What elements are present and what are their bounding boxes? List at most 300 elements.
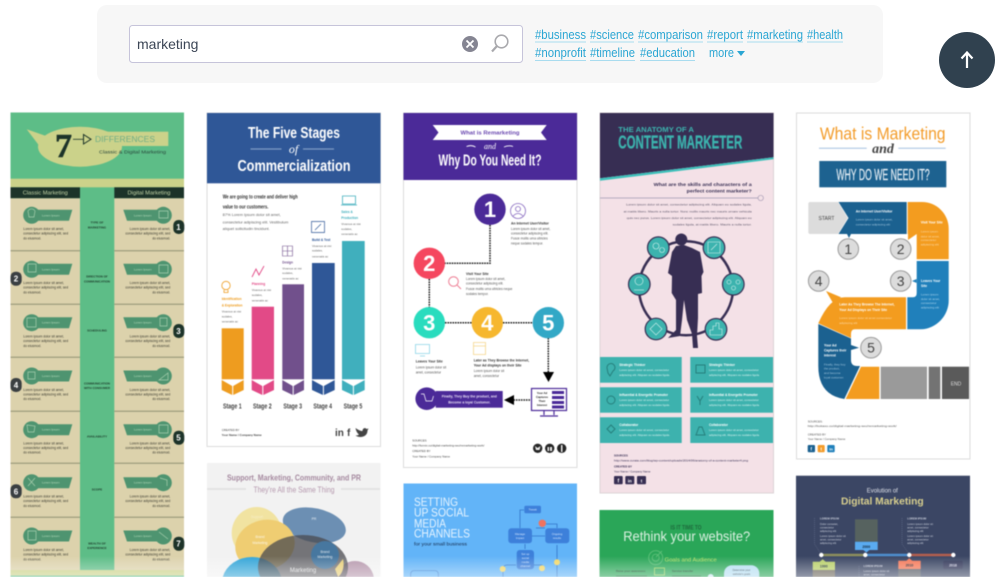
- step 4 text: amet, consectetur: [474, 374, 500, 378]
- photo 2010: [898, 569, 921, 577]
- credits: CREATED BY: [222, 428, 239, 432]
- step tile 4: Lorem ipsum dolor sit amet consectetur: [839, 316, 892, 320]
- right column paragraphs: consectetur adipiscing elit, sed: [125, 339, 170, 343]
- left column paragraphs: Lorem ipsum dolor sit amet,: [23, 281, 64, 285]
- bar: stage 5: [342, 241, 365, 410]
- header: Why Do You Need It?: [438, 153, 542, 170]
- column headers: [10, 187, 184, 198]
- title: MEDIA: [414, 518, 446, 530]
- audience bubble: Determine your: [733, 568, 750, 572]
- right column paragraphs: do eiusmod.: [152, 504, 170, 508]
- divider with knob: [600, 195, 763, 201]
- start tile: [808, 202, 848, 234]
- step 3 text: amet, consectetur: [416, 370, 442, 374]
- numbered tabs: 4: [14, 381, 19, 390]
- orange end tile: [846, 367, 879, 399]
- sources: http://bokaxo.co/digital-marketing-seo/remarketing-work/: [808, 424, 897, 428]
- right column paragraphs: Lorem ipsum dolor sit amet,: [130, 548, 170, 552]
- flow chart: [500, 506, 569, 577]
- flow chart: Tweak: [529, 508, 537, 512]
- step tile 4: adipiscing elit: [839, 321, 857, 325]
- left column paragraphs: do eiusmod.: [23, 236, 41, 240]
- text block: top left: LOREM IPSUM: [820, 516, 840, 520]
- sources: Your Name / Company Name: [614, 470, 651, 474]
- photo 1990: [813, 570, 835, 577]
- card: 7 differences classic and digital marketing: [10, 112, 184, 577]
- left column paragraphs: Lorem ipsum dolor sit amet,: [23, 227, 64, 231]
- header: CONTENT MARKETER: [618, 131, 742, 152]
- left column paragraphs: [23, 227, 68, 561]
- left column paragraphs: Lorem ipsum dolor sit amet,: [23, 548, 64, 552]
- monitor ad graphic: Your Ad: [537, 391, 548, 395]
- step circles: 3: [423, 310, 435, 336]
- monitor ad graphic: Their: [539, 399, 546, 403]
- marker numbers: 1: [844, 241, 852, 257]
- photo 2000: [855, 519, 878, 542]
- small node: [708, 574, 714, 577]
- right column paragraphs: Lorem ipsum dolor sit amet,: [130, 227, 170, 231]
- centre column labels: COMMUNICATION: [84, 381, 110, 385]
- stage captions and icons: Vivamus at nisi: [341, 222, 361, 226]
- search input: marketing: [137, 36, 198, 52]
- step tile 3: adipiscing elit: [921, 306, 939, 310]
- venn labels: Support: [251, 515, 263, 519]
- skill card 5: [600, 417, 682, 443]
- text block: top left: consectetur: [820, 526, 834, 530]
- skill card 5: Collaborator: [619, 423, 639, 427]
- title: Rethink your website?: [623, 528, 750, 544]
- stage captions and icons: Vivamus at nisi: [312, 244, 332, 248]
- right column paragraphs: [125, 227, 170, 561]
- right column paragraphs: consectetur adipiscing elit, sed: [125, 446, 170, 450]
- stage captions and icons: venenatis ac: [222, 319, 238, 323]
- step circles: 4: [481, 310, 494, 336]
- tag 1990: [813, 559, 835, 570]
- centre column labels: WEALTH OF: [88, 541, 106, 545]
- step 2 text: Lorem ipsum dolor sit amet,: [466, 277, 505, 281]
- skill card 6: Lorem ipsum dolor sit amet, consectetur: [709, 428, 759, 432]
- tag 1990: 1990: [820, 564, 828, 568]
- right column paragraphs: consectetur adipiscing elit, sed: [125, 553, 170, 557]
- step tile 3: consectetur: [921, 301, 937, 305]
- hashtag links: more: [709, 46, 734, 60]
- stage captions and icons: venenatis ac: [312, 254, 329, 258]
- ribbon labels: Lorem Ipsum: [134, 213, 152, 217]
- skill cards: [600, 357, 773, 443]
- right column paragraphs: do eiusmod.: [152, 344, 170, 348]
- step tile 5: loyal customer.: [824, 376, 844, 380]
- step 4 text: Lorem ipsum dolor sit: [474, 369, 504, 373]
- question heading: [654, 182, 752, 194]
- header: [600, 113, 774, 181]
- venn labels: Marketing: [253, 541, 268, 545]
- grey tiles: END: [951, 382, 962, 388]
- ribbon labels: Lorem Ipsum: [42, 213, 60, 217]
- icon: line chart: [252, 266, 264, 277]
- hashtag links: #health: [807, 28, 843, 42]
- step circles: [414, 194, 564, 338]
- stage captions and icons: sodales,: [282, 271, 293, 275]
- ribbon labels: Lorem Ipsum: [42, 321, 60, 325]
- right column paragraphs: do eiusmod.: [152, 397, 170, 401]
- skill card 1: Lorem ipsum dolor sit amet, consectetur: [619, 368, 669, 372]
- stage captions and icons: Sales &: [341, 210, 354, 214]
- step tile 4: Your Ad Displays on Their Site: [839, 308, 887, 312]
- left column snippets: Raise your awareness: [616, 569, 646, 573]
- skill card 5: adipiscing elit. Aliquam eu sodales ligula.: [619, 433, 670, 437]
- left column snippets: Service transfer: [672, 569, 694, 573]
- ribbon labels: Lorem Ipsum: [42, 374, 60, 378]
- social icons: [533, 444, 566, 453]
- left column paragraphs: do eiusmod.: [23, 557, 41, 561]
- left column paragraphs: consectetur adipiscing elit, sed: [23, 339, 68, 343]
- text block: top right: Lorem ipsum dolor sit: [907, 522, 933, 526]
- venn labels: Marketing: [290, 568, 316, 574]
- social icon facebook: f: [347, 428, 351, 439]
- skill card 2: Lorem ipsum dolor sit amet, consectetur: [709, 368, 759, 372]
- title: SETTING: [414, 497, 458, 509]
- left column paragraphs: consectetur adipiscing elit, sed: [23, 232, 68, 236]
- intro text: [223, 195, 298, 231]
- bar: stage 2: Stage 2: [253, 403, 272, 410]
- subtitle banner: [819, 161, 946, 187]
- arrow: down to monitor: [543, 372, 554, 382]
- card: anatomy of a content marketer: [600, 113, 774, 493]
- bar: stage 4: Stage 4: [313, 403, 332, 410]
- text block: top left: adipiscing elit: [820, 529, 836, 533]
- final customer banner: Become a loyal Customer.: [448, 400, 490, 404]
- ribbon labels: Lorem Ipsum: [42, 481, 60, 485]
- social squares: f: [617, 478, 619, 484]
- audience bubble: website's goals: [733, 572, 751, 576]
- intro paragraph: quis nec purus. Lorem ipsum dolor sit amet, consectetur adipiscing elit. Aliquam eu: [627, 216, 752, 220]
- header graphic: Classic & Digital Marketing: [99, 149, 167, 154]
- search and tag bar: [97, 5, 883, 83]
- centre column labels: WITH CONSUMER: [84, 386, 111, 390]
- left column paragraphs: Lorem ipsum dolor sit amet,: [23, 334, 64, 338]
- text block: bottom middle: amet, consectetur: [864, 572, 885, 576]
- left column paragraphs: do eiusmod.: [23, 397, 41, 401]
- header: Commercialization: [238, 158, 350, 175]
- section heading: Goals and Audience: [665, 558, 717, 564]
- social squares: in: [628, 478, 632, 483]
- card: setting up social media channels: [404, 484, 577, 577]
- and divider: and: [872, 142, 895, 157]
- skill card 3: Influential & Energetic Promoter: [619, 393, 669, 397]
- grey tiles: [881, 367, 969, 399]
- card: five stages of commercialization: [207, 113, 380, 446]
- intro paragraph: Lorem ipsum dolor sit amet, consectetur adipiscing elit. Aliquam eu sodales ligula,: [626, 203, 752, 207]
- step tile 1: consectetur adipiscing elit: [856, 222, 890, 226]
- step tile 4: [818, 291, 906, 338]
- numbered tabs: 3: [176, 327, 181, 336]
- intro text: consectetur adipiscing elit. Vestibulum: [223, 220, 289, 224]
- step 2 text: [449, 272, 513, 296]
- centre column labels: DIRECTION OF: [86, 275, 108, 279]
- marker numbers: 3: [897, 273, 905, 289]
- sources: Your Name / Company Name: [412, 454, 450, 458]
- step tile 4: Later As They Browse The Internet,: [839, 303, 895, 307]
- step tile 3: dolor sit amet,: [921, 297, 940, 301]
- header graphic: DIFFERENCES: [95, 135, 155, 144]
- bar: stage 1: Stage 1: [223, 403, 242, 410]
- step tile 1: Lorem ipsum dolor sit amet,: [856, 218, 893, 222]
- right column paragraphs: do eiusmod.: [152, 557, 170, 561]
- hashtag links: [535, 28, 843, 60]
- step tile 2: adipiscing elit: [921, 242, 939, 246]
- intro text: We are going to create and deliver high: [223, 195, 298, 201]
- title: What is Marketing: [820, 123, 946, 143]
- left column snippets: [616, 569, 701, 576]
- skill card 4: adipiscing elit. Aliquam eu sodales ligula.: [709, 403, 760, 407]
- venn title: They're All the Same Thing: [254, 486, 334, 495]
- text block: top right: amet, consectetur: [907, 538, 929, 542]
- credits: Your Name / Company Name: [222, 433, 262, 437]
- numbered markers: [808, 239, 911, 358]
- start tile: START: [819, 216, 834, 222]
- ribbon labels: Lorem Ipsum: [134, 534, 152, 538]
- text block: top left: amet, consectetur: [820, 538, 841, 542]
- ribbons: [23, 207, 172, 545]
- sources: CREATED BY: [412, 449, 431, 453]
- intro paragraph: sodales ligula, at mattis libero. Mauris a nulla tortor.: [673, 223, 752, 227]
- stage captions and icons: sodales,: [252, 293, 263, 297]
- venn title: Support, Marketing, Community, and PR: [227, 473, 361, 483]
- stage captions and icons: sodales,: [312, 249, 323, 253]
- header: What is Remarketing: [460, 130, 520, 136]
- numbered tabs: 2: [14, 275, 19, 284]
- right column paragraphs: consectetur adipiscing elit, sed: [125, 232, 170, 236]
- icon: small screen: [654, 568, 664, 575]
- title: Digital Marketing: [841, 495, 924, 507]
- step 1 text: neque sodales tempor.: [511, 242, 543, 246]
- header graphic: 7: [55, 128, 72, 165]
- step tile 5: Captures their: [824, 349, 847, 353]
- social squares: in: [829, 446, 833, 452]
- step 1 text: Lorem ipsum dolor sit amet,: [511, 227, 550, 231]
- marker numbers: 2: [897, 241, 905, 257]
- left column paragraphs: consectetur adipiscing elit, sed: [23, 553, 68, 557]
- step tile 1: An Internet User/Visitor: [856, 209, 893, 213]
- sources: SOURCES: [412, 438, 427, 442]
- step tile 3: Site: [921, 284, 927, 288]
- sources: [614, 454, 749, 474]
- icon: magnifier: [492, 35, 508, 52]
- step tile 5: interest: [824, 354, 837, 358]
- left column paragraphs: Lorem ipsum dolor sit amet,: [23, 441, 64, 445]
- step tile 5: the product,: [824, 366, 840, 370]
- flow chart: social: [522, 556, 529, 560]
- step 1 text: An Internet User/Visitor: [511, 222, 549, 226]
- social squares: t: [820, 446, 822, 452]
- step 1 text: consectetur adipiscing elit.: [511, 232, 548, 236]
- bottom fade overlay: [0, 556, 1000, 577]
- device outline: [411, 571, 438, 577]
- step tile 5: Finally, they buy: [824, 362, 846, 366]
- centre column labels: SCHEDULING: [87, 328, 108, 332]
- numbered tabs: 6: [14, 487, 19, 496]
- text block: top right: adipiscing elit: [907, 541, 924, 545]
- hashtag links: #comparison: [638, 28, 703, 42]
- numbered tabs: 1: [176, 223, 181, 232]
- skill card 4: [690, 387, 773, 413]
- icon: target: [649, 551, 663, 565]
- ribbon labels: Lorem Ipsum: [134, 321, 152, 325]
- text block: bottom middle: LOREM IPSUM: [864, 564, 883, 568]
- social squares: t: [641, 478, 643, 483]
- skill card 3: adipiscing elit. Aliquam eu sodales ligula.: [619, 403, 670, 407]
- text block: top right: LOREM IPSUM: [907, 516, 927, 520]
- step tile 5: [818, 324, 860, 399]
- icon: laptop heart: [341, 196, 357, 205]
- subtitle: for your small business: [414, 541, 468, 546]
- stage captions and icons: sodales,: [341, 227, 352, 231]
- skill card 6: Collaborator: [709, 423, 729, 427]
- stage captions and icons: sodales,: [222, 314, 233, 318]
- skill card 3: Lorem ipsum dolor sit amet, consectetur: [619, 398, 669, 402]
- step 4 text: Later as They Browse the Internet,: [474, 359, 529, 363]
- silhouette: [668, 234, 704, 348]
- intro text: value to our customers.: [223, 204, 269, 210]
- monitor ad graphic: [532, 388, 566, 416]
- right column paragraphs: do eiusmod.: [152, 451, 170, 455]
- centre column labels: [84, 220, 111, 550]
- left column paragraphs: do eiusmod.: [23, 504, 41, 508]
- right column paragraphs: consectetur adipiscing elit, sed: [125, 499, 170, 503]
- right column paragraphs: consectetur adipiscing elit, sed: [125, 286, 170, 290]
- centre column labels: AVAILABILITY: [87, 435, 107, 439]
- step 4 text: [474, 342, 529, 378]
- step 3 text: [416, 344, 446, 374]
- bar chart: stages: [222, 241, 365, 410]
- left column paragraphs: Lorem ipsum dolor sit amet,: [23, 388, 64, 392]
- scroll to top button: [939, 32, 995, 88]
- step tile 2: consectetur: [921, 238, 936, 242]
- header: [207, 113, 380, 183]
- ribbon labels: Lorem Ipsum: [42, 428, 60, 432]
- skill card 5: Lorem ipsum dolor sit amet, consectetur: [619, 428, 669, 432]
- stage captions and icons: & Exploration: [222, 304, 242, 308]
- step 2 text: Fusce mollis urna ultricies neque: [466, 287, 513, 291]
- ribbon labels: [42, 213, 152, 538]
- skill card 4: Lorem ipsum dolor sit amet, consectetur: [709, 398, 759, 402]
- skill card 4: Influential & Energetic Promoter: [709, 393, 758, 397]
- text block: top right: adipiscing elit: [907, 529, 924, 533]
- venn labels: Brand: [320, 550, 330, 554]
- stage captions and icons: Identification: [222, 297, 242, 301]
- and divider: [819, 142, 946, 157]
- text block: bottom middle: Lorem ipsum dolor sit: [864, 569, 889, 573]
- stage captions and icons: [222, 196, 361, 323]
- ribbon labels: Lorem Ipsum: [134, 428, 152, 432]
- board game path: [808, 202, 969, 399]
- stage captions and icons: venenatis ac: [252, 298, 268, 302]
- stage captions and icons: venenatis ac: [341, 232, 358, 236]
- step tile 3: Lorem ipsum: [921, 292, 939, 296]
- text block: top right: amet, consectetur: [907, 526, 929, 530]
- skill nodes: [628, 237, 744, 340]
- right column paragraphs: Lorem ipsum dolor sit amet,: [130, 281, 170, 285]
- left column paragraphs: consectetur adipiscing elit, sed: [23, 392, 68, 396]
- flow chart: Impact: [516, 536, 524, 540]
- flow chart: channel: [520, 564, 531, 568]
- flow chart: Ongoing: [552, 532, 563, 536]
- stage captions and icons: Build & Test: [312, 238, 331, 242]
- sources: http://funnix.co/digital-marketing-seo/remarketing-work/: [412, 444, 484, 448]
- intro paragraph: [624, 203, 752, 227]
- title: [414, 497, 470, 540]
- audience bubble: [724, 565, 759, 577]
- step 3 text: Lorem ipsum dolor sit: [416, 366, 446, 370]
- intro text: 87% Lorem Ipsum dolor sit amet,: [223, 213, 281, 217]
- ribbon labels: Lorem Ipsum: [134, 481, 152, 485]
- arrow: left to customer: [504, 395, 514, 405]
- text block: top left: Lorem ipsum dolor sit: [820, 534, 846, 538]
- numbered tabs: 5: [176, 434, 181, 443]
- header: and: [484, 142, 497, 151]
- left column paragraphs: Lorem ipsum dolor sit amet,: [23, 494, 64, 498]
- right column paragraphs: do eiusmod.: [152, 236, 170, 240]
- flow chart: media: [521, 560, 530, 564]
- left column paragraphs: consectetur adipiscing elit, sed: [23, 446, 68, 450]
- step circles: 1: [484, 197, 496, 222]
- hashtag links: #marketing: [747, 28, 803, 42]
- step tile 1: [838, 202, 907, 238]
- card: what is remarketing: [404, 113, 577, 468]
- tag 2010: 2010: [906, 564, 913, 568]
- left column paragraphs: do eiusmod.: [23, 344, 41, 348]
- final customer banner: Finally, They Buy the product, and: [442, 395, 497, 399]
- title: UP SOCIAL: [414, 508, 470, 520]
- bar: stage 3: [282, 284, 304, 410]
- intro text: aliquet sollicitudin tincidunt.: [223, 227, 270, 231]
- bar: stage 2: [252, 307, 274, 410]
- monitor ad graphic: Captures: [536, 395, 549, 399]
- tag 2018: [943, 561, 963, 569]
- monitor ad graphic: Interest: [537, 403, 547, 407]
- final customer banner: [415, 387, 503, 410]
- venn labels: PR: [312, 517, 317, 521]
- skills ring: [628, 234, 744, 348]
- tag 2010: [898, 558, 921, 569]
- flow chart: Manage: [515, 532, 525, 536]
- step tile 3: Leaves Your: [921, 279, 941, 283]
- stage captions and icons: venenatis ac: [282, 276, 299, 280]
- step 3 text: Leaves Your Site: [416, 360, 443, 364]
- sources: [412, 438, 484, 458]
- right column paragraphs: Lorem ipsum dolor sit amet,: [130, 388, 170, 392]
- right column paragraphs: Lorem ipsum dolor sit amet,: [130, 334, 170, 338]
- header: The Five Stages: [248, 125, 340, 142]
- question heading: What are the skills and characters of a: [654, 182, 752, 187]
- right column paragraphs: Lorem ipsum dolor sit amet,: [130, 494, 170, 498]
- icon: clear search: [462, 36, 478, 52]
- step 2 text: Visit Your Site: [466, 272, 489, 276]
- intro paragraph: at mattis libero. Mauris a nulla tortor. Nunc mollis mauris nec mauris ornare vehicula: [624, 209, 752, 213]
- marker numbers: 5: [867, 340, 875, 356]
- hashtag links: #report: [707, 28, 743, 42]
- tag 2000: [855, 542, 878, 552]
- step tile 2: [908, 202, 949, 259]
- text block: top right: [907, 516, 933, 545]
- credits: [222, 428, 262, 437]
- step tile 5: Your Ad: [824, 344, 836, 348]
- hashtag links: #timeline: [590, 46, 635, 60]
- text block: top right: Lorem ipsum dolor sit: [907, 534, 933, 538]
- hashtag links: #nonprofit: [535, 46, 586, 60]
- node icons: [634, 242, 740, 335]
- left column paragraphs: consectetur adipiscing elit, sed: [23, 499, 68, 503]
